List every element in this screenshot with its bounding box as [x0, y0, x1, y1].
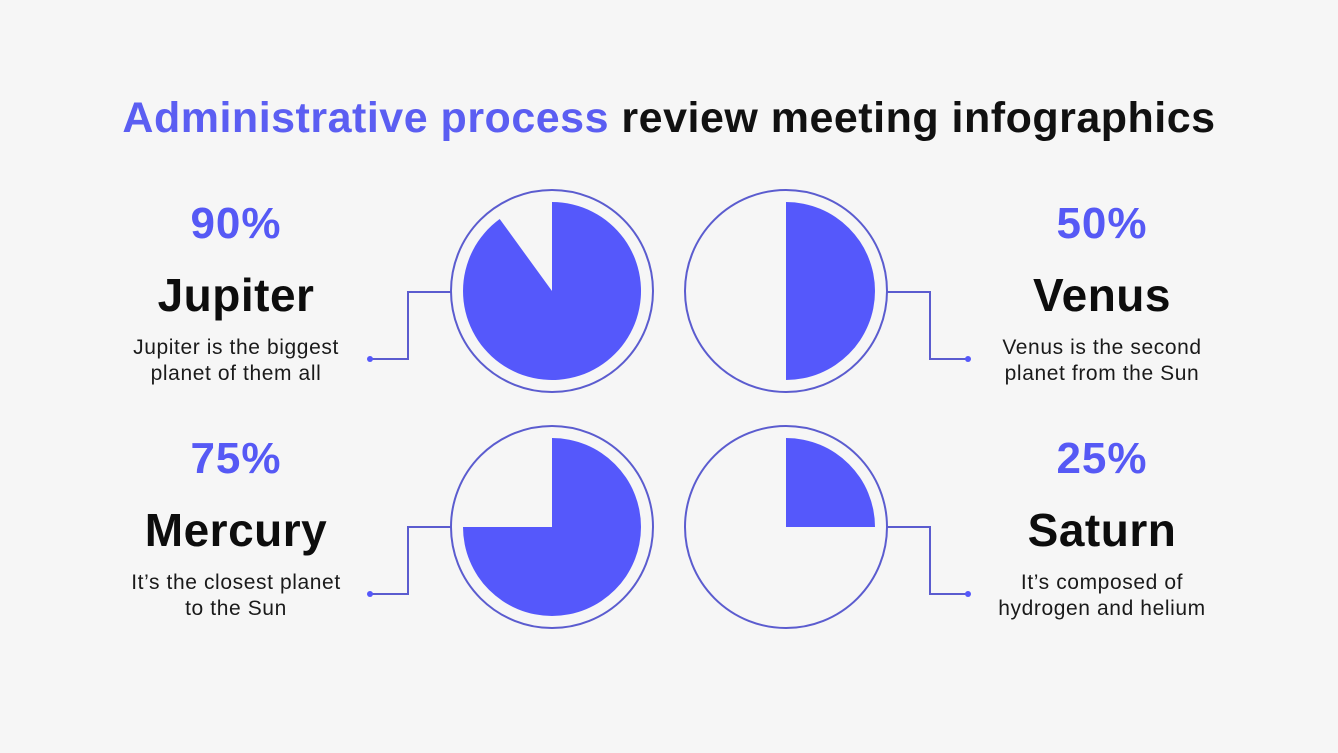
block: Saturn: It’s composed of	[1021, 571, 1183, 594]
block: Mercury: to the Sun	[185, 597, 287, 620]
block: Jupiter: Jupiter	[158, 269, 314, 321]
connector: Jupiter	[367, 292, 451, 362]
block: Venus	[1002, 199, 1202, 385]
pie: Venus 50%	[685, 190, 887, 392]
block: Mercury: Mercury	[145, 504, 327, 556]
block: Jupiter: planet of them all	[151, 362, 321, 385]
connector: Mercury	[367, 527, 451, 597]
block: Mercury: 75%	[190, 434, 282, 483]
block: Mercury	[131, 434, 341, 620]
block: Jupiter: Jupiter is the biggest	[133, 336, 339, 359]
connector: Venus	[887, 292, 971, 362]
pie: Jupiter 90%	[451, 190, 653, 392]
block: Venus: 50%	[1056, 199, 1148, 248]
block: Jupiter: 90%	[190, 199, 282, 248]
block: Venus: Venus	[1033, 269, 1171, 321]
block: Saturn	[998, 434, 1206, 620]
block: Saturn: hydrogen and helium	[998, 597, 1206, 620]
pie: Saturn 25%	[685, 426, 887, 628]
connector: Saturn	[887, 527, 971, 597]
title: Administrative process review meeting infographics	[122, 94, 1216, 142]
block: Mercury: It’s the closest planet	[131, 571, 341, 594]
block: Jupiter	[133, 199, 339, 385]
block: Venus: Venus is the second	[1002, 336, 1202, 359]
block: Venus: planet from the Sun	[1005, 362, 1199, 385]
block: Saturn: 25%	[1056, 434, 1148, 483]
pie: Mercury 75%	[451, 426, 653, 628]
block: Saturn: Saturn	[1028, 504, 1176, 556]
